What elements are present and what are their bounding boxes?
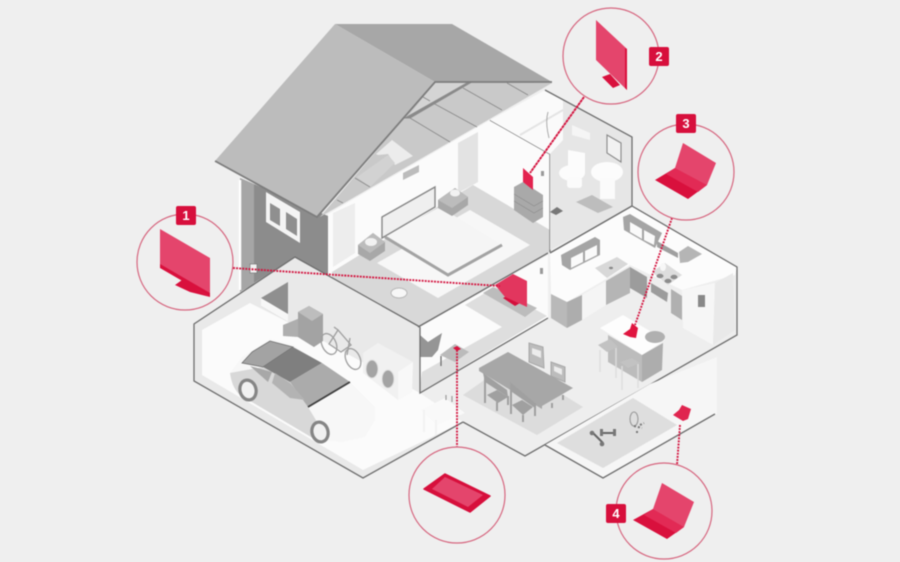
kitchen island [598,315,665,390]
bicycle [318,327,364,372]
dining set [463,343,583,435]
car [230,339,375,444]
washer and dryer [363,343,413,400]
small devices in the house [453,168,691,421]
living room [418,253,548,393]
callout 3: laptop [638,114,734,220]
callout 4: laptop: 4 [612,506,620,521]
callout: tablet [409,447,505,543]
basement gym [545,357,717,478]
kitchen and dining floor [420,206,737,456]
attic underside [320,82,552,217]
exterior gable wall [240,178,328,292]
roof [215,24,552,217]
kitchen cabinets [551,214,702,328]
dresser [514,171,544,223]
bathroom [490,90,632,253]
callout 1: television: 1 [182,208,190,223]
callout 3: laptop: 3 [682,116,690,131]
callout 1: television [137,206,233,310]
fridge [682,273,735,345]
nightstand left [358,233,385,261]
callout 2: monitor: 2 [655,49,663,64]
callout 2: monitor [563,8,669,104]
garage and utility area [194,257,465,478]
dotted connector lines [233,97,680,465]
bedroom floor and walls [328,120,550,327]
nightstand right [438,188,468,216]
trash bin and garage storage [283,306,323,347]
bed [382,187,502,275]
callout 4: laptop [606,463,712,559]
